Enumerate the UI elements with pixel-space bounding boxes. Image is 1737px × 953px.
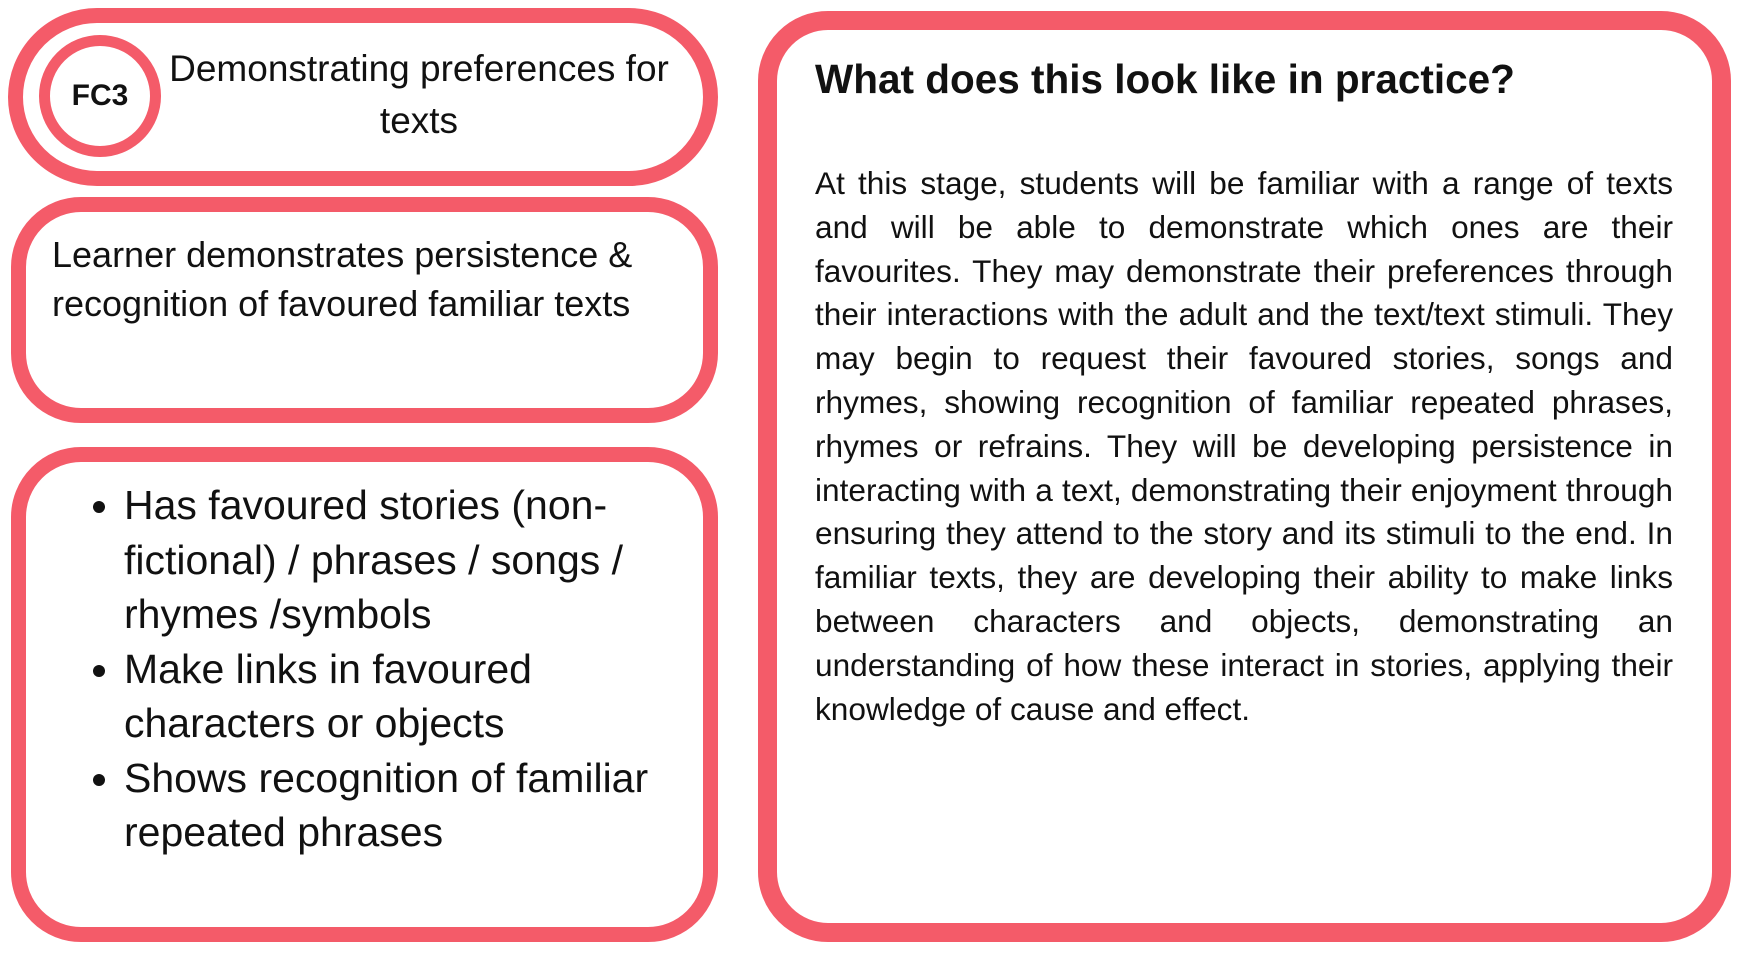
panel: learner statement — [11, 197, 718, 423]
statement text: Learner demonstrates persistence & recognition of favoured familiar texts — [52, 234, 632, 324]
bullet points: Has favoured stories (non-fictional) / phrases / songs / rhymes /symbols — [124, 482, 623, 637]
heading: What does this look like in practice? — [815, 56, 1515, 102]
icon: FC3 circle badge — [39, 35, 161, 157]
bullet points: Make links in favoured characters or objects — [124, 646, 532, 746]
panel: title pill — [8, 8, 718, 186]
icon: FC3 circle badge: FC3 — [72, 79, 128, 112]
panel: bullet list — [11, 447, 718, 942]
paragraph: At this stage, students will be familiar with a range of texts and will be able to demonstrate which ones are their favourites. They may demonstrate their preferences through their interactions with the adult and the text/text stimuli. They may begin to request their favoured stories, songs and rhymes, showing recognition of familiar repeated phrases, rhymes or refrains. They will be developing persistence in interacting with a text, demonstrating their enjoyment through ensuring they attend to the story and its stimuli to the end. In familiar texts, they are developing their ability to make links between characters and objects, demonstrating an understanding of how these interact in stories, applying their knowledge of cause and effect. — [815, 165, 1673, 727]
title text: Demonstrating preferences for texts — [169, 48, 669, 141]
panel: what does this look like in practice — [758, 11, 1731, 942]
bullet points — [93, 482, 648, 855]
bullet points: Shows recognition of familiar repeated phrases — [124, 754, 648, 855]
